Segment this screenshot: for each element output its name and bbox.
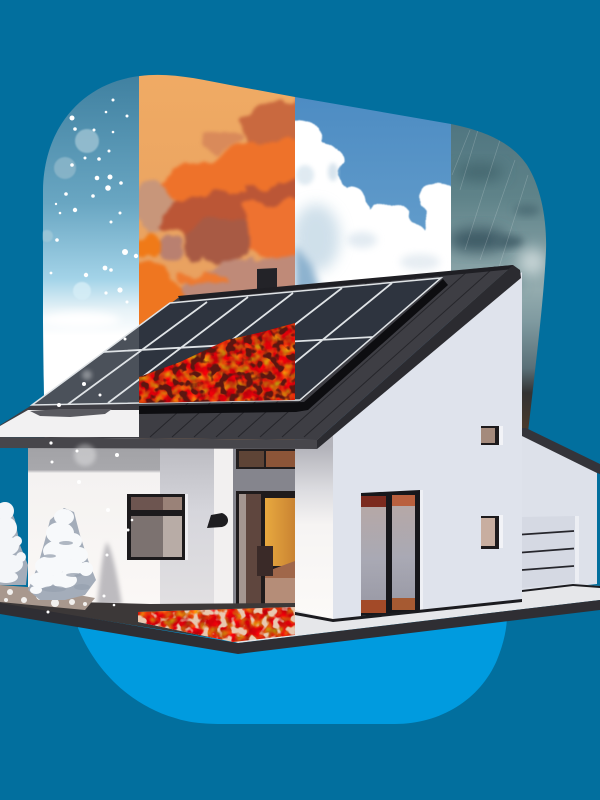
small upper window (481, 426, 503, 445)
falling snow over house (46, 338, 133, 614)
roof (0, 260, 521, 449)
patio glass door (361, 490, 423, 616)
sky strip: winter (40, 70, 139, 450)
paved platform (0, 584, 600, 654)
garage wall (522, 430, 597, 592)
main gable wall (295, 272, 522, 621)
autumn leaves on panels (139, 323, 295, 403)
autumn leaves on ground (138, 607, 295, 642)
wall lamp (207, 513, 228, 528)
standing-seam ribs (150, 262, 500, 437)
gable edge (317, 265, 521, 449)
platform edge (0, 600, 600, 654)
snow on lower roof (0, 410, 139, 437)
sky strip: storm (451, 124, 546, 430)
sky strip: summer (295, 97, 451, 440)
four-season sky panel (40, 70, 551, 450)
snowy shrub base (0, 585, 95, 610)
platform surface (200, 584, 600, 643)
light blue base blob (78, 615, 507, 724)
roof plane (0, 265, 513, 440)
fascia (0, 437, 317, 449)
house wall: left wing (28, 447, 295, 610)
garage door (522, 516, 579, 588)
corner window (127, 494, 188, 560)
snowy tree: right (28, 508, 96, 600)
panel shadow (139, 279, 448, 414)
chimney (257, 268, 277, 295)
snowy tree: left (0, 502, 28, 585)
tree shadow on wall (97, 542, 122, 605)
sky strip: autumn (139, 74, 295, 440)
small lower window (481, 515, 503, 549)
ridge cap (178, 265, 514, 301)
entrance door with warm interior (236, 449, 295, 608)
wall base shadow (295, 599, 522, 622)
garage wing (522, 428, 600, 592)
solar panels (30, 277, 444, 406)
garage roof edge (522, 428, 600, 474)
